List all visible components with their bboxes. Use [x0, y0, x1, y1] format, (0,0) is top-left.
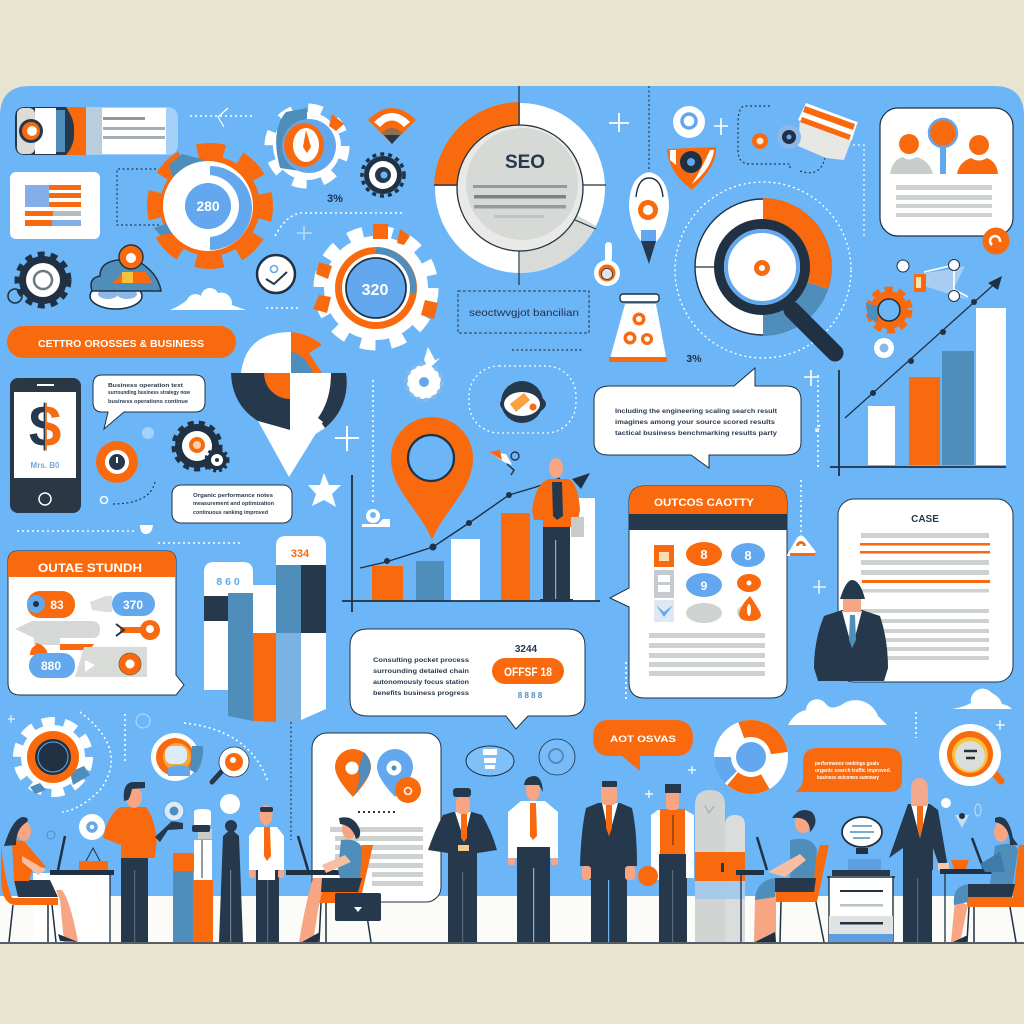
icon: plus	[688, 766, 696, 774]
3D stacked bars: 8 6 0	[216, 576, 240, 588]
percent mark: 3%	[327, 193, 343, 205]
dashed vertical	[124, 714, 126, 762]
person: seated woman right of kiosk	[736, 810, 829, 942]
dashed vertical line	[648, 86, 650, 175]
desk left	[33, 836, 114, 942]
person: man in white shirt B	[508, 776, 558, 942]
panel: outcome city: 9	[701, 579, 708, 593]
icon: target ring	[673, 106, 705, 138]
icon: small rocket	[489, 450, 519, 475]
panel: outcome city	[610, 486, 787, 698]
3D stacked bars	[204, 536, 326, 722]
speech box: Organic performance notes	[193, 493, 273, 499]
speech bubble: CTA: autonomously focus station	[373, 679, 469, 686]
phone with dollar: $	[29, 394, 61, 459]
percent mark: 3%	[686, 353, 702, 365]
panel: case study with man	[814, 499, 1013, 682]
icon: light dot	[142, 427, 154, 439]
icon: double gear	[174, 423, 228, 471]
dotted vertical	[915, 712, 917, 738]
dotted dividers	[17, 525, 242, 543]
icon: shield	[667, 147, 716, 190]
dashed frame with plate	[469, 366, 576, 433]
monitor and filing desk	[827, 817, 895, 942]
column figures	[173, 809, 213, 942]
phone with dollar	[10, 378, 81, 513]
speech bubble: orange: AOT OSVAS	[610, 734, 676, 745]
speech bubble: CTA: surrounding detailed chain	[373, 668, 469, 675]
speech bubble: orange	[593, 720, 693, 771]
speech bubble: small: surrounding business strategy now	[108, 390, 190, 396]
dashed with tent icon	[787, 480, 816, 556]
person: seated woman center	[286, 817, 381, 942]
icon: plus	[996, 720, 1005, 730]
icon: plus	[645, 790, 653, 798]
cloud	[170, 288, 246, 310]
donut chart	[714, 720, 788, 794]
person: man in white shirt	[249, 805, 284, 942]
icon: plus	[813, 580, 826, 594]
3D stacked bars: 334	[291, 548, 310, 560]
small bits	[941, 798, 981, 828]
speech box: continuous ranking improved	[193, 510, 268, 516]
magnifier donut chart	[675, 182, 851, 358]
clouds	[788, 689, 1012, 725]
decorative dotted arrow	[190, 108, 254, 127]
phone with dollar: $	[29, 394, 61, 459]
icon: check badge	[257, 255, 295, 293]
icon: plus	[335, 426, 359, 451]
short dashes	[512, 349, 584, 351]
small outline ring	[47, 831, 55, 839]
bar chart: top right	[830, 276, 1006, 476]
speech bubble: small: business operations continue	[108, 399, 188, 405]
speech bubble: small	[93, 375, 205, 429]
person: man in orange vest	[638, 784, 694, 942]
presenter figure	[532, 458, 584, 602]
icon: orange gear	[866, 289, 910, 358]
flag card	[10, 172, 100, 239]
panel: outcome study: 880	[41, 659, 61, 673]
SEO circle chart	[434, 86, 606, 285]
speech bubble: orange text	[795, 748, 902, 792]
speech bubble: orange text: organic search traffic improved.	[815, 768, 891, 774]
icon: round review	[151, 733, 203, 781]
person: man in suit B	[580, 781, 637, 942]
icon: small gear with feather	[406, 347, 442, 400]
gear: white with orange center	[269, 108, 345, 184]
dashed arrow	[853, 145, 864, 236]
icon: envelope with dashed frame	[738, 103, 858, 173]
dashed connector	[117, 169, 160, 225]
panel: map pins	[312, 733, 441, 902]
icon: star	[308, 473, 341, 507]
speech box	[172, 485, 292, 523]
small icons	[8, 714, 150, 728]
orange pill title: CETTRO OROSSES & BUSINESS	[38, 338, 204, 350]
gear: orange 280	[154, 150, 266, 262]
bar chart with presenter	[342, 458, 600, 612]
icon: white ring	[79, 814, 105, 840]
dashed leader	[814, 375, 820, 470]
icon: orange ring	[96, 441, 138, 483]
dashed line with lock	[362, 380, 390, 527]
icon: magnifier small	[212, 747, 249, 782]
speech bubble: CTA: 3244	[515, 644, 538, 655]
speech bubble: CTA	[350, 629, 585, 729]
person: man in orange	[103, 782, 184, 942]
SEO circle chart: SEO	[505, 152, 545, 173]
icon: wifi	[368, 108, 416, 144]
icon: pen pin	[629, 172, 669, 264]
panel: outcome city: OUTCOS CAOTTY	[654, 497, 755, 509]
speech bubble: long text: imagines among your source scored results	[615, 419, 775, 426]
person: seated woman right	[940, 817, 1024, 942]
orange pill title	[7, 326, 236, 358]
icon: cloud with user	[90, 245, 161, 309]
man in suit	[814, 580, 888, 681]
panel: outcome city: 8	[744, 548, 752, 563]
icon: small dark gear	[362, 154, 404, 196]
speech bubble: CTA: benefits business progress	[373, 690, 469, 697]
icon: plus	[297, 226, 312, 240]
icon: key ring	[594, 242, 620, 286]
panel: outcome city: 8	[700, 547, 708, 562]
icon: dark gear left	[8, 254, 69, 306]
shield pie chart	[231, 332, 347, 477]
icon: megaphone network	[897, 260, 968, 302]
kiosk cylinders	[695, 790, 745, 942]
speech bubble: orange text: performance rankings goals	[815, 761, 879, 767]
person: dark figure	[219, 820, 243, 942]
speech bubble: long text: Including the engineering scaling search result	[615, 408, 778, 415]
icon: outlined badge	[539, 739, 575, 775]
gear: 320: 320	[362, 282, 388, 299]
gear: 320	[313, 224, 438, 345]
icon: weight bag	[609, 294, 667, 362]
person: tall man in suit	[889, 778, 949, 942]
dashed swoosh	[112, 482, 155, 504]
icon: review lens	[939, 724, 1001, 786]
person: man in suit A	[428, 788, 497, 942]
floor	[0, 896, 1024, 943]
icon: plus	[609, 113, 629, 132]
speech bubble: CTA: OFFSF 18	[504, 665, 552, 679]
dashed route	[274, 213, 402, 238]
panel: outcome study: 370	[123, 598, 143, 612]
speech bubble: long text: tactical business benchmarking results party	[615, 430, 777, 437]
panel: outcome study: 83	[50, 598, 64, 612]
panel: outcome study: OUTAE STUNDH	[38, 561, 142, 575]
speech bubble: orange text: business outcomes summary	[817, 775, 880, 781]
phone with dollar: Mrs. B0	[31, 461, 60, 470]
label box: dashed: seoctwvgjot bancilian	[469, 307, 579, 319]
speech bubble: small: Business operation text	[108, 383, 183, 389]
icon: globe bubble	[466, 746, 514, 776]
icon: plus	[714, 118, 728, 135]
label box: dashed	[458, 291, 589, 333]
icon: plus	[804, 370, 819, 386]
dashed arc	[62, 712, 111, 812]
dashed curve	[184, 723, 268, 782]
speech bubble: CTA: Consulting pocket process	[373, 657, 469, 664]
top left banner	[15, 107, 178, 155]
dotted vertical	[625, 662, 627, 702]
white balloon	[220, 794, 240, 814]
card: people	[880, 108, 1013, 254]
gear: orange 280: 280	[196, 198, 220, 214]
location pin	[391, 417, 473, 540]
speech bubble: long text	[594, 368, 801, 468]
person: seated woman left	[1, 817, 78, 942]
small dashes	[266, 307, 300, 309]
small ring	[100, 496, 108, 504]
panel: outcome study	[8, 551, 184, 695]
speech bubble: CTA: 8 8 8 8	[518, 691, 543, 700]
speech box: measurement and optimization	[193, 501, 274, 507]
panel: case study with man: CASE	[911, 514, 939, 525]
gear: bottom left	[17, 721, 90, 794]
dashed connector	[290, 722, 292, 840]
